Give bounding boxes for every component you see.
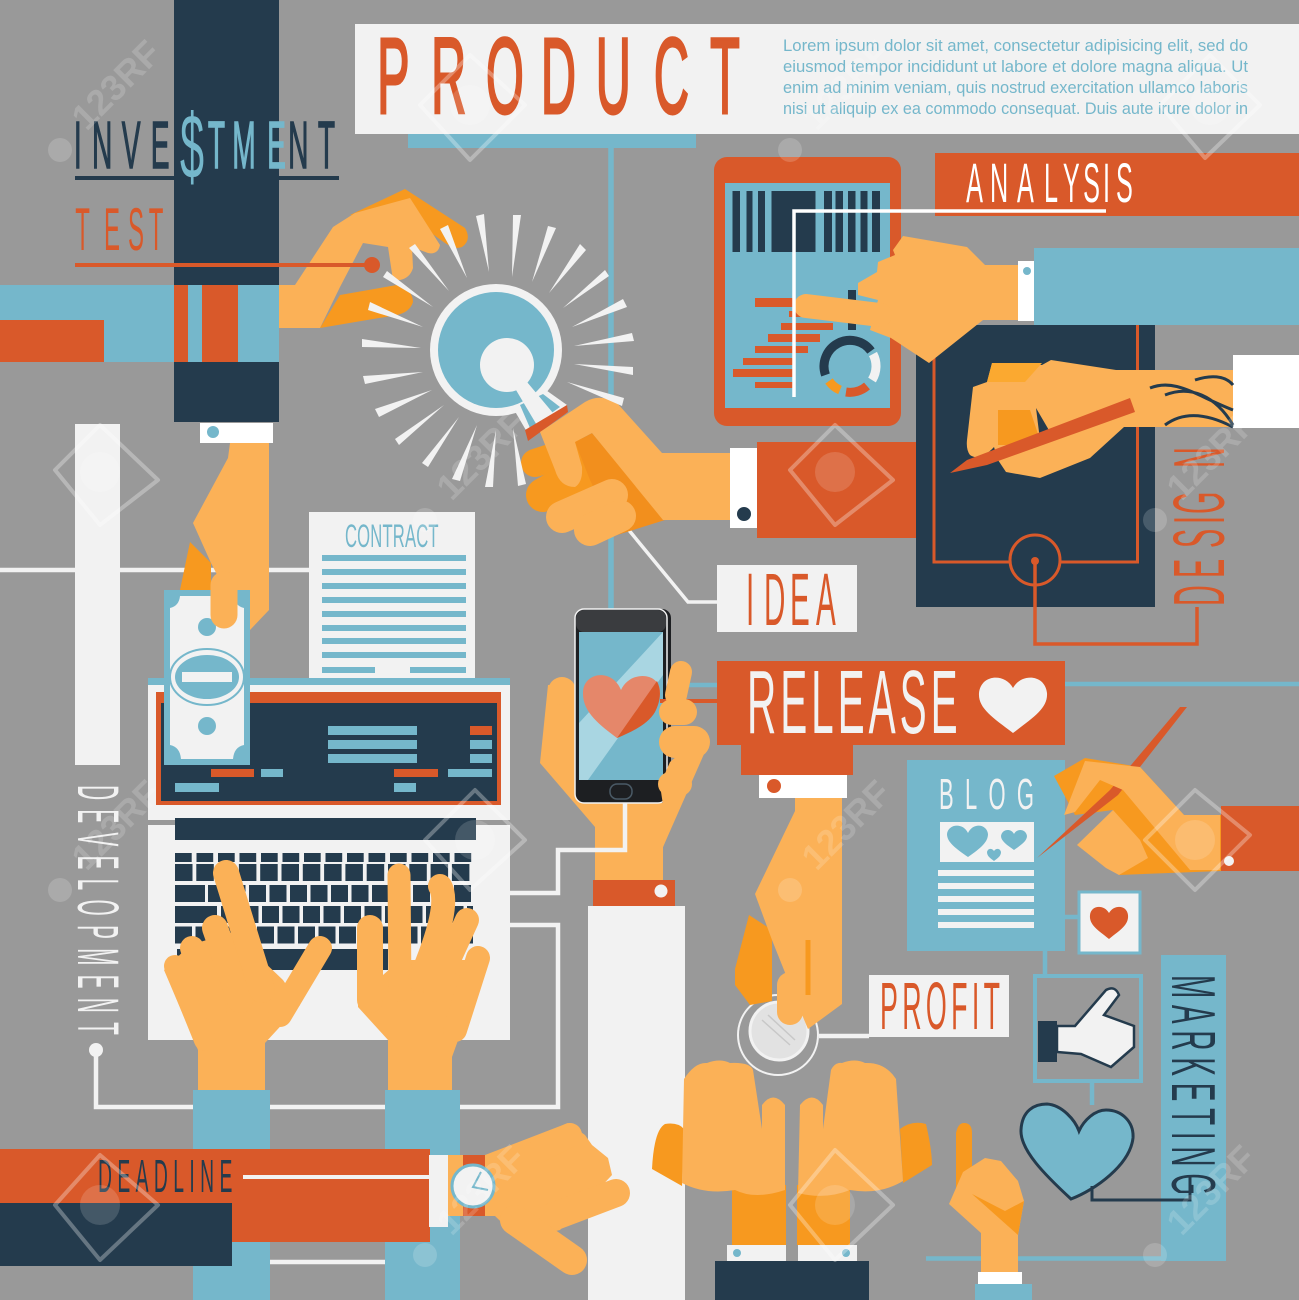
intro text [783, 37, 1248, 118]
label: idea: IDEA [746, 558, 836, 641]
header panel [355, 15, 1299, 148]
laptop [148, 678, 510, 1040]
hands: open palms [652, 1060, 932, 1300]
icon: light bulb [430, 284, 568, 441]
panel: white development bar [65, 424, 129, 1057]
icon: coin [738, 995, 818, 1075]
dark tablet: design [916, 325, 1155, 607]
keyboard [175, 858, 473, 960]
title: PRODUCT [377, 15, 740, 136]
heading: investment: INVE [74, 107, 170, 182]
intro text: Lorem ipsum dolor sit amet, consectetur adipisicing elit, sed do [783, 37, 1248, 55]
tablet: analysis chart [714, 157, 901, 426]
investment column and band [0, 0, 279, 422]
rays around the bulb [362, 214, 634, 487]
intro text: enim ad minim veniam, quis nostrud exercitation ullamco laboris [783, 79, 1248, 97]
watermarks: 123RF [1158, 402, 1264, 507]
hand: writing with pen [1037, 707, 1299, 875]
hand: pinching hand [75, 189, 468, 328]
label: analysis [935, 153, 1299, 216]
icon: blue heart [1021, 1104, 1133, 1199]
hand: dropping coin [735, 775, 847, 1029]
watermarks: 123RF [63, 32, 169, 137]
design label and connector: DESIGN [1158, 447, 1240, 606]
watermarks: 123RF [793, 32, 899, 137]
hand: pointing at tablet [806, 236, 1299, 363]
label: idea [717, 558, 857, 641]
hand and phone [540, 609, 718, 906]
watermarks: 123RF [428, 1137, 534, 1242]
label: profit: PROFIT [880, 969, 1000, 1043]
hand: pointing up [949, 1123, 1032, 1300]
watermarks: 123RF [1158, 1137, 1264, 1242]
sleeves and deadline band: DEADLINE [98, 1152, 232, 1202]
label: release [717, 652, 1065, 775]
hand: holding the bulb [535, 398, 916, 538]
connector from phone to laptop [508, 803, 625, 893]
donut chart [824, 340, 876, 392]
watermarks: 123RF [428, 402, 534, 507]
white connector over tablet [794, 211, 1106, 397]
label: analysis: ANALYSIS [966, 153, 1133, 215]
panel: white development bar: DEVELOPMENT [65, 785, 129, 1035]
panel: blog [907, 760, 1065, 951]
center white column [588, 906, 685, 1300]
panel: marketing: MARKETING [1158, 975, 1227, 1195]
heading: investment: NT [288, 107, 335, 182]
hand: finger over banknote [210, 585, 238, 615]
heading: investment: TME [208, 107, 286, 182]
icon: thumbs up [1035, 976, 1141, 1081]
hand: drawing with pencil [950, 355, 1299, 478]
design label and connector [1035, 447, 1240, 644]
phone [575, 609, 671, 803]
panel: blog: BLOG [939, 771, 1034, 819]
hand: back of hand with banknote [180, 423, 273, 630]
heading: investment [74, 96, 339, 198]
icon: heart box [1079, 892, 1140, 953]
watermarks: 123RF [63, 772, 169, 877]
intro text: eiusmod tempor incididunt ut labore et dolore magna aliqua. Ut [783, 58, 1248, 76]
watermarks: 123RF [793, 772, 899, 877]
document: contract: CONTRACT [345, 519, 439, 555]
hand: with wristwatch [448, 1123, 616, 1260]
hands: typing on keyboard [164, 873, 487, 1090]
heading: test: TEST [75, 196, 163, 263]
icon: banknote [164, 590, 250, 765]
document: contract [309, 512, 475, 680]
sleeves and deadline band [0, 1090, 460, 1300]
panel: marketing [1092, 955, 1227, 1261]
label: release: RELEASE [747, 652, 958, 752]
heading: investment: $ [180, 96, 204, 198]
intro text: nisi ut aliquip ex ea commodo consequat. Duis aute irure dolor in [783, 100, 1248, 118]
